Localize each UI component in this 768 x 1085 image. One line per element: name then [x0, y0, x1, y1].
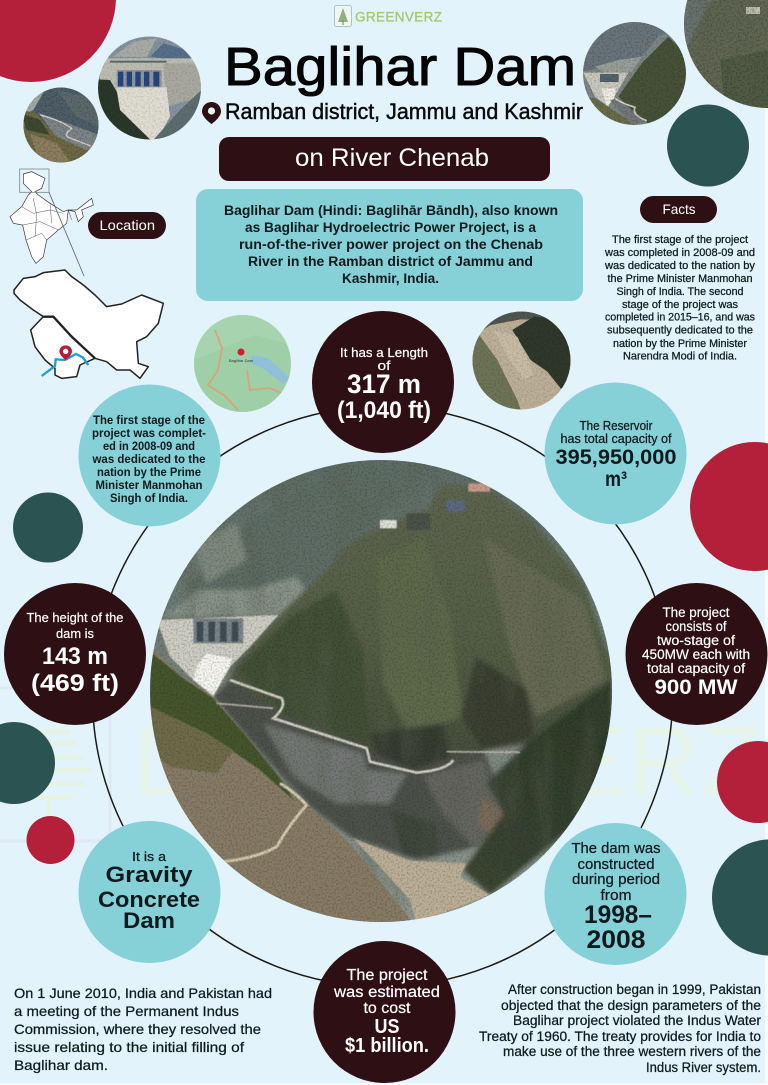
icon: red map pin [59, 345, 72, 360]
stat circle: estimated cost: was estimated [333, 984, 440, 1001]
text block: Indus Water Treaty objection: Indus River system. [646, 1060, 761, 1075]
stat circle: height: The height of the [26, 610, 124, 625]
connector ring [92, 406, 672, 986]
text block: 2010 meeting: a meeting of the Permanent Indus [14, 1003, 239, 1019]
text block: Indus Water Treaty objection: Treaty of 1960. The treaty provides for India to [479, 1029, 761, 1044]
stat circle: length [312, 311, 454, 453]
decorative circle: crimson top left [0, 0, 116, 82]
text block: 2010 meeting [14, 985, 272, 1073]
label pill: Facts: Facts [662, 201, 696, 217]
text block: 2010 meeting: Commission, where they resolved the [14, 1021, 261, 1037]
stat circle: first stage: Singh of India. [110, 491, 188, 505]
text block: Indus Water Treaty objection: make use of the three western rivers of the [503, 1044, 761, 1059]
stat circle: dam type: Gravity [106, 862, 193, 887]
stat circle: project capacity: consists of [666, 619, 727, 634]
stat circle: dam type: Concrete [98, 887, 200, 912]
stat circle: construction period: during period [572, 871, 660, 888]
stat circle: project capacity: two-stage of [657, 633, 735, 648]
stat circle: reservoir capacity: The Reservoir [580, 419, 652, 433]
stat circle: construction period: from [600, 887, 632, 904]
stat circle: reservoir capacity: m³ [605, 468, 627, 491]
stat circle: construction period: constructed [578, 856, 654, 873]
stat circle: first stage: was dedicated to the [92, 452, 206, 466]
label pill: Facts [640, 196, 717, 223]
label pill: Location: Location [100, 217, 155, 233]
stat circle: first stage: nation by the Prime [97, 465, 201, 479]
watermark: faint logo and lettering [0, 688, 762, 841]
text block: facts: nation by the Prime Minister [613, 338, 747, 350]
stat circle: height: 143 m [42, 643, 108, 670]
logo: Greenverz [334, 6, 442, 26]
stat circle: estimated cost: The project [346, 967, 428, 984]
panel: introduction: Kashmir, India. [342, 271, 439, 286]
icon: river line [42, 354, 88, 376]
stat circle: length: 317 m [347, 369, 421, 399]
subtitle with location pin [202, 99, 583, 124]
text block: facts: The first stage of the project [612, 234, 748, 246]
map: Jammu and Kashmir [14, 270, 163, 378]
photo: location map [194, 315, 292, 413]
text block: 2010 meeting: issue relating to the initial filling of [14, 1039, 244, 1055]
decorative circle: dark teal lower right [712, 840, 768, 956]
panel: introduction: run-of-the-river power project on the Chenab [239, 237, 543, 252]
stat circle: height: dam is [56, 626, 94, 641]
text block: facts: Singh of India. The second [616, 286, 744, 298]
text block: facts [604, 234, 756, 362]
watermark: faint logo and lettering: ERZ [560, 706, 762, 816]
stat circle: construction period: 1998– [584, 901, 652, 929]
stat circle: estimated cost: to cost [364, 1000, 411, 1017]
panel: introduction: as Baglihar Hydroelectric Power Project, is a [245, 220, 536, 235]
text block: facts: completed in 2015–16, and was [605, 312, 755, 324]
watermark: faint logo and lettering: D [133, 706, 203, 816]
text block: Indus Water Treaty objection: Baglihar project violated the Indus Water [513, 1013, 762, 1028]
text block: 2010 meeting: Baglihar dam. [14, 1057, 108, 1073]
photo: main dam and valley [150, 460, 613, 923]
stat circle: project capacity: 900 MW [654, 676, 738, 699]
photo: dam and valley, top right [582, 20, 688, 127]
stat circle: project capacity: 450MW each with [642, 647, 750, 662]
banner: on River Chenab [219, 137, 550, 181]
stat circle: reservoir capacity: 395,950,000 [556, 446, 676, 469]
text block: 2010 meeting: On 1 June 2010, India and Pakistan had [14, 985, 272, 1001]
stat circle: project capacity [626, 583, 768, 725]
stat circle: estimated cost: US [374, 1016, 400, 1038]
stat circle: construction period: The dam was [572, 840, 660, 857]
photo: dam close-up [97, 35, 203, 142]
stat circle: estimated cost: $1 billion. [345, 1035, 429, 1057]
photo: location map: Baglihar Dam [229, 358, 254, 363]
stat circle: length: (1,040 ft) [337, 397, 431, 424]
icon: map marker [238, 348, 244, 356]
decorative circle: dark teal left [13, 492, 83, 562]
stat circle: dam type: Dam [123, 908, 175, 933]
text block: Indus Water Treaty objection [479, 982, 762, 1075]
panel: introduction [196, 189, 583, 301]
text block: facts: Narendra Modi of India. [623, 350, 737, 362]
panel: introduction: River in the Ramban district of Jammu and [248, 254, 533, 269]
decorative circle: dark teal top right [667, 104, 749, 186]
icon: location pin [202, 102, 221, 124]
text block: Indus Water Treaty objection: After construction began in 1999, Pakistan [508, 982, 761, 997]
text block: facts: the Prime Minister Manmohan [608, 273, 753, 285]
text block: facts: stage of the project was [622, 299, 738, 311]
stat circle: dam type: It is a [132, 850, 166, 864]
map: India with inset box [10, 169, 93, 276]
stat circle: first stage [78, 384, 220, 526]
text block: facts: was completed in 2008-09 and [604, 247, 755, 259]
stat circle: first stage: ed in 2008-09 and [103, 439, 195, 453]
decorative circle: crimson lower right [717, 741, 768, 823]
stat circle: height [4, 583, 146, 725]
title: Baglihar Dam [224, 37, 576, 97]
stat circle: height: (469 ft) [31, 670, 119, 697]
text block: facts: subsequently dedicated to the [607, 324, 753, 336]
stat circle: first stage: Minister Manmohan [96, 478, 202, 492]
decorative circle: crimson small left [26, 816, 74, 864]
photo: mountain, top right corner [684, 0, 768, 110]
stat circle: reservoir capacity: has total capacity of [560, 432, 672, 446]
stat circle: project capacity: The project [662, 605, 730, 620]
text block: Indus Water Treaty objection: objected that the design parameters of the [501, 998, 761, 1013]
banner: on River Chenab: on River Chenab [295, 144, 489, 172]
panel: introduction: Baglihar Dam (Hindi: Baglihār Bāndh), also known [224, 203, 558, 218]
label pill: Location [88, 212, 166, 239]
decorative circle: crimson right [690, 442, 768, 571]
subtitle text: Ramban district, Jammu and Kashmir [225, 99, 583, 124]
stat circle: reservoir capacity [544, 382, 686, 524]
stat circle: construction period: 2008 [586, 926, 646, 954]
stat circle: first stage: The first stage of the [93, 413, 205, 427]
photo: river [471, 310, 572, 412]
decorative circle: dark teal lower left [0, 722, 55, 804]
stat circle: length: of [378, 358, 391, 373]
stat circle: project capacity: total capacity of [647, 661, 745, 676]
photo: small valley [22, 87, 100, 165]
text block: facts: was dedicated to the nation by [604, 260, 756, 272]
stat circle: estimated cost [314, 941, 456, 1083]
stat circle: first stage: project was complet- [92, 426, 206, 440]
logo: Greenverz: GREENVERZ [355, 10, 442, 24]
stat circle: length: It has a Length [340, 345, 428, 360]
stat circle: construction period [544, 823, 686, 965]
stat circle: dam type [78, 821, 220, 963]
